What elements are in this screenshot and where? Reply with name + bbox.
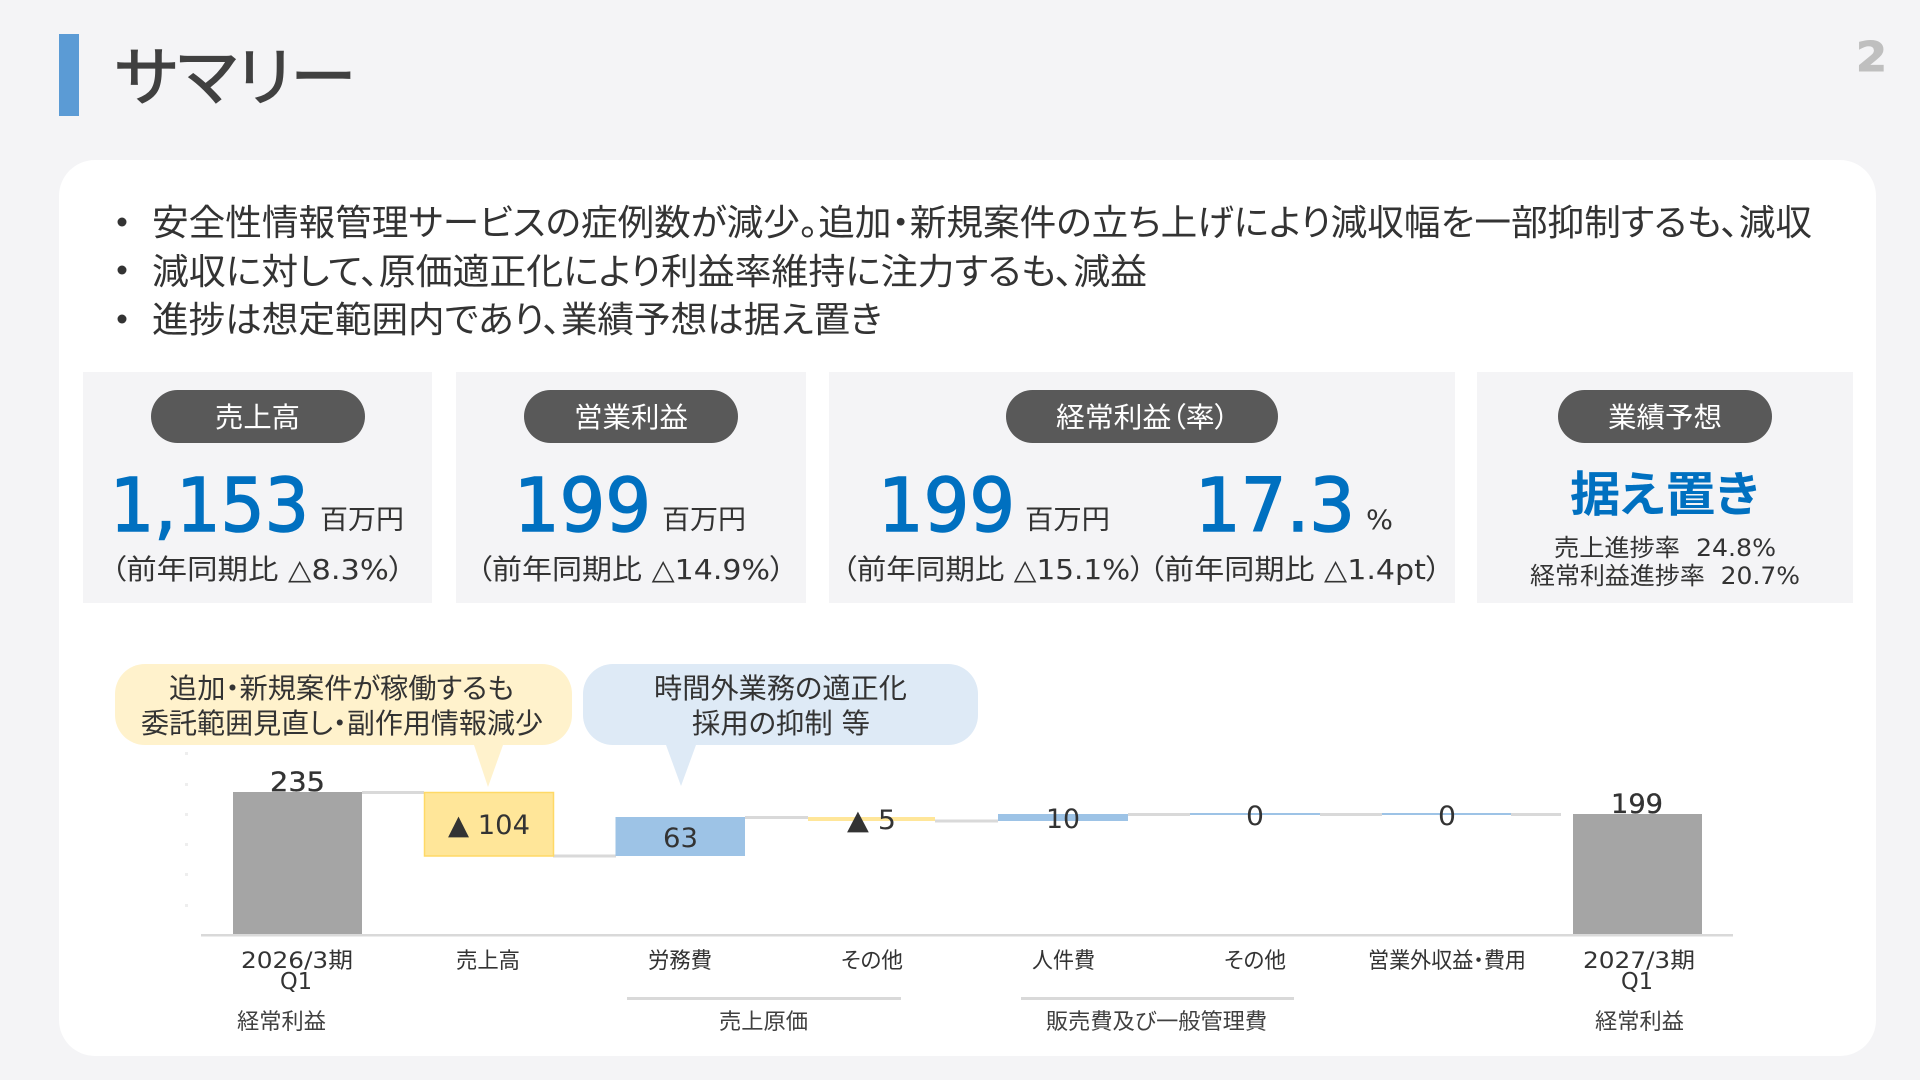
callout: labor cost comment: 採用の抑制 等 (692, 707, 870, 740)
category labels: 売上高 (456, 949, 520, 974)
callout: labor cost comment: 時間外業務の適正化 (654, 672, 907, 705)
bar: labor cost 63 (616, 817, 745, 856)
panel: ordinary profit and margin KPI: % (1366, 505, 1393, 536)
bar: other SG&A 0 (1190, 813, 1320, 815)
category labels: Q1 (1621, 969, 1653, 995)
panel: earnings forecast (1477, 372, 1853, 603)
bar: other cost -5 (808, 817, 935, 821)
page number: 2 (1856, 33, 1887, 81)
group labels with brackets: 販売費及び一般管理費 (1046, 1010, 1267, 1035)
panel: main white card (59, 160, 1876, 1056)
data labels: ▲ 5 (847, 805, 896, 836)
panel: operating profit KPI: 百万円 (662, 505, 746, 536)
panel: ordinary profit and margin KPI: 経常利益（率） (1056, 401, 1229, 434)
panel: sales KPI: （前年同期比 △8.3%） (111, 553, 404, 586)
group labels with brackets (237, 997, 1684, 1035)
faint axis ticks (185, 752, 188, 907)
summary bullet list: 進捗は想定範囲内であり、業績予想は据え置き (152, 300, 882, 341)
panel: earnings forecast: 据え置き (1570, 467, 1759, 523)
title: サマリー (115, 42, 356, 116)
panel: operating profit KPI: 営業利益 (574, 401, 688, 434)
data labels: 199 (1611, 789, 1663, 820)
callout: sales comment: 委託範囲見直し・副作用情報減少 (141, 707, 543, 740)
panel: earnings forecast: 売上進捗率 24.8% (1554, 534, 1776, 562)
panel: ordinary profit and margin KPI (829, 372, 1455, 603)
connector lines (362, 791, 1561, 858)
panel: ordinary profit and margin KPI: 百万円 (1025, 505, 1110, 536)
panel: sales KPI: 売上高 (215, 401, 300, 434)
data labels: ▲ 104 (448, 810, 530, 841)
panel: earnings forecast: 経常利益進捗率 20.7% (1530, 562, 1800, 590)
panel: sales KPI: 百万円 (320, 505, 404, 536)
category labels: 人件費 (1032, 949, 1095, 974)
category labels (241, 949, 1695, 995)
panel: ordinary profit and margin KPI: （前年同期比 △15.1%） (842, 553, 1145, 586)
bar: non-operating 0 (1382, 813, 1511, 815)
summary bullet list: 減収に対して、原価適正化により利益率維持に注力するも、減益 (152, 252, 1147, 293)
category labels: 2027/3期 (1583, 949, 1695, 974)
panel: operating profit KPI: 199 (514, 463, 651, 549)
panel: earnings forecast: 業績予想 (1608, 401, 1722, 434)
group labels with brackets: 経常利益 (237, 1010, 326, 1035)
bar: sales -104 (424, 792, 554, 856)
data labels: 10 (1046, 804, 1080, 835)
callout: sales comment: 追加・新規案件が稼働するも (169, 672, 514, 705)
waterfall chart (185, 752, 1733, 1035)
category labels: 2026/3期 (241, 949, 353, 974)
bar: personnel 10 (998, 814, 1128, 821)
category labels: その他 (1224, 949, 1286, 974)
category labels: Q1 (280, 969, 312, 995)
panel: operating profit KPI (456, 372, 806, 603)
category labels: その他 (841, 949, 903, 974)
category labels: 営業外収益・費用 (1368, 949, 1526, 974)
title accent bar (59, 34, 79, 116)
data labels (270, 767, 1663, 854)
group labels with brackets: 売上原価 (719, 1010, 808, 1035)
panel: sales KPI (83, 372, 432, 603)
panel: ordinary profit and margin KPI: 199 (878, 463, 1015, 549)
chart baseline (201, 934, 1733, 936)
callout: labor cost comment (583, 664, 978, 786)
panel: ordinary profit and margin KPI: （前年同期比 △1.4pt） (1149, 553, 1441, 586)
panel: ordinary profit and margin KPI: 17.3 (1195, 463, 1355, 549)
data labels: 0 (1246, 801, 1264, 832)
bar: FY2026/3 Q1 ordinary profit 235 (233, 792, 362, 934)
data labels: 235 (270, 767, 325, 798)
category labels: 労務費 (648, 949, 712, 974)
panel: operating profit KPI: （前年同期比 △14.9%） (477, 553, 785, 586)
summary bullet list: 安全性情報管理サービスの症例数が減少。追加・新規案件の立ち上げにより減収幅を一部抑制するも、減収 (152, 203, 1812, 244)
bar: FY2027/3 Q1 ordinary profit 199 (1573, 814, 1702, 934)
group labels with brackets: 経常利益 (1595, 1010, 1684, 1035)
summary bullet list (118, 203, 1812, 341)
data labels: 0 (1438, 801, 1456, 832)
panel: sales KPI: 1,153 (110, 463, 309, 549)
data labels: 63 (663, 823, 698, 854)
callout: sales comment (115, 664, 572, 787)
